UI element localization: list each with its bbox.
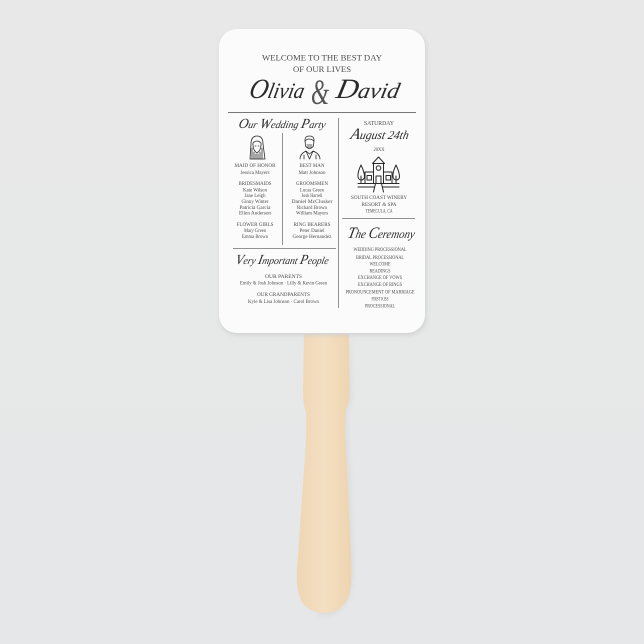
column divider [281, 133, 284, 245]
left column: bride's side: Jessica Mayers [240, 170, 270, 176]
ceremony order list [346, 248, 415, 309]
heading: our wedding party: Our Wedding Party [237, 116, 328, 132]
icon: bride [250, 136, 265, 159]
ceremony order list: PRONOUNCEMENT OF MARRIAGE [346, 290, 415, 295]
parents: OUR PARENTS [265, 274, 302, 280]
right column: groom's side: RING BEARERS [294, 222, 330, 228]
parents [240, 274, 327, 286]
ceremony order list: READINGS [370, 270, 391, 275]
left column: bride's side: Ginny Winter [242, 199, 269, 205]
title: couple names [247, 72, 404, 112]
right column: groom's side: Richard Brown [297, 205, 327, 211]
heading: welcome [262, 54, 382, 74]
divider above ceremony [342, 217, 415, 220]
right column: groom's side: BEST MAN [300, 163, 325, 169]
right column: groom's side: GROOMSMEN [296, 181, 328, 187]
divider above VIP [233, 247, 336, 250]
left column: bride's side: Patricia Garcia [240, 205, 271, 211]
venue address [351, 195, 407, 214]
title: couple names: David [332, 74, 404, 105]
grandparents: Kyle & Lisa Johnson · Carol Brown [248, 299, 319, 305]
left column: bride's side: Jane Leigh [244, 193, 266, 199]
left column: bride's side [234, 163, 276, 240]
icon: groom [300, 136, 320, 159]
heading: welcome: OF OUR LIVES [293, 65, 351, 74]
vertical divider [337, 118, 340, 308]
panel: date and venue [348, 121, 411, 214]
wooden handle [297, 334, 352, 613]
icon: venue building [358, 157, 400, 192]
title: couple names: & [311, 72, 329, 112]
left column: bride's side: Ellen Anderson [239, 210, 271, 216]
venue address: TEMECULA, CA [366, 208, 393, 214]
right column: groom's side: Matt Johnson [298, 170, 326, 176]
ceremony order list: WELCOME [370, 262, 391, 268]
panel: wedding party [234, 116, 333, 245]
heading: date: August 24th [348, 126, 411, 143]
left column: bride's side: Mary Green [244, 228, 266, 234]
panel: date and venue: 20XX [374, 147, 385, 153]
right column: groom's side: George Hernandez [292, 234, 332, 240]
right column: groom's side: William Mayers [296, 210, 328, 216]
fan card [219, 29, 425, 333]
heading: welcome: WELCOME TO THE BEST DAY [262, 54, 382, 62]
ceremony order list: EXCHANGE OF VOWS [358, 276, 402, 281]
ceremony order list: BRIDAL PROCESSIONAL [356, 256, 404, 261]
venue address: RESORT & SPA [362, 202, 397, 208]
venue address: SOUTH COAST WINERY [351, 195, 407, 201]
top divider [228, 112, 416, 113]
handle shadow [318, 336, 354, 616]
panel: date and venue: SATURDAY [364, 121, 395, 127]
ceremony order list: EXCHANGE OF RINGS [358, 283, 402, 288]
right column: groom's side: Peter Daniel [300, 228, 325, 234]
heading: the ceremony: The Ceremony [346, 225, 417, 242]
left column: bride's side: MAID OF HONOR [234, 163, 276, 169]
grandparents [248, 292, 319, 305]
right column: groom's side: Lucas Green [300, 188, 324, 194]
left column: bride's side: FLOWER GIRLS [236, 222, 274, 228]
heading: very important people: Very Important People [234, 252, 331, 268]
parents: Emily & Josh Johnson · Lilly & Kevin Green [240, 280, 327, 286]
right column: groom's side [292, 163, 333, 240]
panel: the ceremony [346, 225, 417, 309]
fan card shadow [220, 31, 426, 335]
title: couple names: Olivia [247, 74, 308, 105]
left column: bride's side: Emma Brown [242, 234, 268, 240]
grandparents: OUR GRANDPARENTS [257, 292, 310, 298]
ceremony order list: PROCESSIONAL [365, 304, 395, 309]
right column: groom's side: Daniel McClusker [292, 199, 333, 205]
right column: groom's side: Josh Harrell [302, 193, 323, 199]
left column: bride's side: Kate Wilson [243, 188, 267, 194]
ceremony order list: WEDDING PROCESSIONAL [354, 248, 407, 253]
ceremony order list: FIRST KISS [372, 298, 389, 303]
left column: bride's side: BRIDESMAIDS [238, 181, 272, 187]
panel: very important people [234, 252, 331, 305]
